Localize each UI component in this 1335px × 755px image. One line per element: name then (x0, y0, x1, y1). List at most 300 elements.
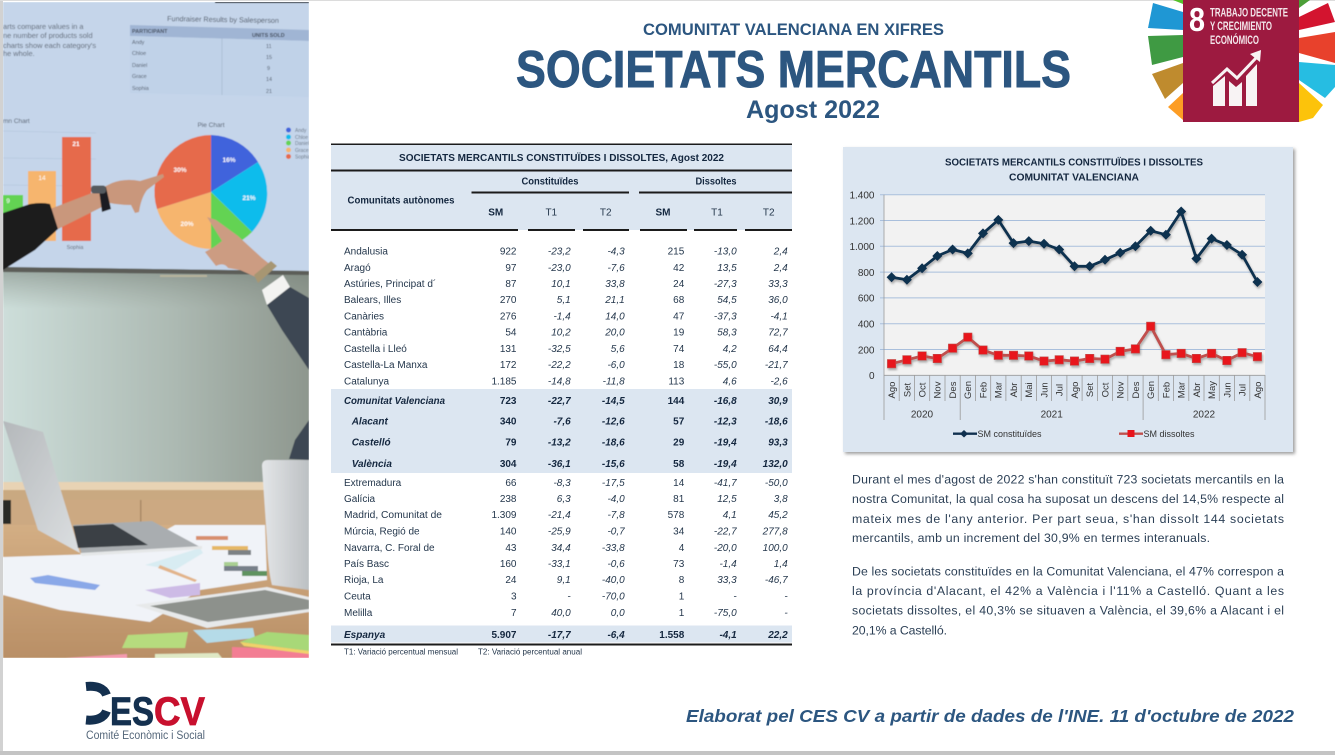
row: Catalunya (344, 376, 788, 388)
row: Castella-La Manxa: -6,0 (607, 360, 625, 371)
line: SM constituïdes (892, 212, 1257, 282)
row: Catalunya: -11,8 (603, 376, 625, 388)
row: Astúries: 33,3 (768, 279, 788, 290)
row: València: -15,6 (602, 459, 625, 470)
row: País Basc: País Basc (344, 559, 389, 570)
screen pie chart: Grace (295, 148, 309, 154)
table header bands (331, 144, 792, 231)
year labels: 2021 (1041, 410, 1063, 420)
row: Castella-La Manxa: -22,2 (548, 360, 571, 371)
row: València: València (352, 459, 392, 470)
icon: SDG 8 badge with coloured wheel: TRABAJO DECENTE (1210, 8, 1288, 20)
row: Astúries (344, 278, 788, 290)
row: Castelló: Castelló (352, 438, 391, 448)
column headers: Constituïdes (522, 176, 579, 188)
row: Catalunya: -2,6 (770, 376, 788, 388)
row: Andalusia: -4,3 (607, 246, 625, 258)
screen table: 9 (267, 66, 270, 72)
axis ticks (884, 195, 1265, 420)
month labels: Abr (1192, 383, 1203, 397)
kicker: COMUNITAT VALENCIANA EN XIFRES (643, 21, 944, 39)
month labels: Gen (963, 381, 974, 399)
row: Andalusia: Andalusia (344, 246, 388, 258)
row: Andalusia: 2,4 (773, 246, 788, 258)
row: Cantàbria: 72,7 (768, 328, 788, 338)
line: SM dissoltes (892, 326, 1257, 364)
row: Rioja: 24 (505, 575, 517, 586)
row: Castella-La Manxa (344, 360, 788, 371)
row: Múrcia: 140 (500, 526, 517, 538)
row: Castella i Lleó: 131 (500, 344, 517, 355)
row: Galícia: 3,8 (774, 494, 788, 505)
row: Balears: 21,1 (604, 295, 625, 306)
highlight band: Comunitat Valenciana (331, 389, 792, 473)
row: Alacant: -12,3 (714, 416, 737, 428)
row: Castelló: -18,6 (602, 438, 625, 448)
row: Comunitat Valenciana (344, 396, 788, 407)
screen table: Andy (132, 40, 145, 46)
y axis labels: 800 (858, 268, 875, 279)
row: Galícia (344, 494, 788, 505)
row: Balears: 54,5 (717, 295, 737, 306)
row: Ceuta: -70,0 (602, 592, 625, 602)
row: Balears: 68 (673, 295, 685, 306)
row: Castella i Lleó: 64,4 (768, 344, 788, 355)
laptop right (262, 460, 309, 590)
row: Canàries: -37,3 (714, 312, 737, 322)
table footnote: T2: Variació percentual anual (478, 648, 582, 656)
year labels (911, 410, 1216, 420)
month labels: Feb (1161, 382, 1172, 398)
month labels: Nov (1116, 381, 1127, 398)
row: Catalunya: 4,6 (723, 376, 737, 388)
screen pie chart (154, 122, 311, 249)
row: Rioja: Rioja, La (344, 575, 384, 586)
row: Ceuta: 1 (679, 592, 685, 602)
title block (516, 21, 1071, 124)
row: Balears (344, 295, 788, 306)
row: Castelló: -13,2 (548, 438, 571, 448)
screen column chart: 21 (72, 141, 80, 148)
icon: SDG 8 badge with coloured wheel: 8 (1189, 1, 1205, 38)
row: Aragó: Aragó (344, 263, 371, 274)
month labels: Jul (1055, 384, 1066, 396)
row: Galícia: 238 (500, 494, 517, 505)
row: Extremadura: -50,0 (765, 478, 788, 489)
column headers: Dissoltes (696, 176, 737, 188)
screen table: Fundraiser Results by Salesperson (167, 14, 279, 25)
row: Ceuta: Ceuta (344, 592, 371, 602)
month labels: Jun (1039, 382, 1050, 398)
row: Canàries: 14,0 (605, 312, 625, 322)
row: Balears: Balears, Illes (344, 295, 401, 306)
row: Aragó: 97 (505, 263, 517, 274)
row: País Basc: 73 (673, 559, 685, 570)
logo: CES CV (86, 686, 205, 742)
row: Catalunya: Catalunya (344, 376, 389, 388)
row: Galícia: 81 (673, 494, 685, 505)
column headers: T1 (545, 208, 558, 218)
row: Castella-La Manxa: -21,7 (765, 360, 788, 371)
laptop left (3, 421, 202, 556)
row: València: 58 (673, 459, 685, 470)
screen pie chart: Daniel (295, 141, 309, 147)
row: València: 132,0 (763, 459, 788, 470)
row: Navarra (344, 543, 788, 554)
row: Comunitat Valenciana: -16,8 (714, 396, 737, 407)
source credit: Elaborat pel CES CV a partir de dades de l'INE. 11 d'octubre de 2022 (686, 706, 1294, 726)
row: Rioja: 33,3 (717, 575, 737, 586)
screen pie chart: 20% (180, 221, 194, 228)
row: Castelló (352, 438, 788, 448)
month labels: Nov (933, 381, 944, 398)
row: València (352, 459, 788, 470)
row: Cantàbria: Cantàbria (344, 328, 388, 338)
row: Madrid: -21,4 (548, 510, 571, 521)
row: Canàries: 276 (500, 312, 517, 322)
row: Navarra: 4 (679, 543, 685, 554)
row: Espanya: 1.558 (659, 630, 685, 641)
screen pie chart: 16% (222, 157, 236, 164)
row: Ceuta: - (567, 592, 571, 602)
screen text block: ne number of products sold (3, 31, 93, 40)
row: Aragó: 2,4 (773, 263, 788, 274)
row: Balears: 5,1 (557, 295, 571, 306)
row: Castella i Lleó: -32,5 (548, 344, 571, 355)
row: Espanya: -6,4 (607, 630, 625, 641)
row: Ceuta: - (784, 592, 788, 602)
row: Castella-La Manxa: 172 (500, 360, 517, 371)
month labels: May (1207, 381, 1218, 399)
month labels: Mai (1024, 382, 1035, 398)
row: Cantàbria: 20,0 (604, 328, 625, 338)
row: Catalunya: 1.185 (491, 376, 517, 388)
row: Galícia: 6,3 (557, 494, 571, 505)
row: Astúries: Astúries, Principat d´ (344, 278, 436, 290)
plot area (884, 195, 1265, 375)
screen table: 21 (266, 89, 272, 95)
row: Espanya: 22,2 (767, 630, 788, 641)
row: València: -36,1 (548, 459, 571, 470)
screen text block: he whole. (3, 49, 35, 58)
row: Múrcia: Múrcia, Regió de (344, 526, 420, 538)
month labels: Oct (1100, 382, 1111, 397)
row: Ceuta: - (733, 592, 737, 602)
row: Comunitat Valenciana: -14,5 (602, 396, 625, 407)
table rows (344, 246, 788, 641)
logo: CES CV: Comité Econòmic i Social (86, 730, 205, 742)
tablet (135, 587, 309, 628)
chart legend: SM dissoltes (1144, 429, 1195, 439)
month labels (887, 381, 1264, 399)
row: València: 304 (500, 459, 517, 470)
row: País Basc: -0,6 (607, 559, 625, 570)
row: Alacant: -12,6 (602, 416, 625, 428)
y axis labels: 1.200 (849, 216, 875, 227)
row: Cantàbria: 54 (505, 328, 517, 338)
row: Alacant: 57 (673, 416, 685, 428)
row: Castella i Lleó: Castella i Lleó (344, 344, 407, 355)
row: Castella-La Manxa: -55,0 (714, 360, 737, 371)
column headers: T1 (711, 208, 723, 218)
row: Múrcia: 277,8 (762, 526, 788, 538)
row: Comunitat Valenciana: Comunitat Valenciana (344, 396, 445, 407)
row: Balears: 270 (500, 295, 517, 306)
row: Alacant: 340 (500, 416, 517, 428)
row: Castella i Lleó: 74 (673, 344, 685, 355)
left arm pointing (3, 174, 164, 270)
icon: SDG 8 badge with coloured wheel (1148, 0, 1335, 122)
row: Astúries: 87 (505, 279, 517, 290)
sticky notes (65, 628, 309, 658)
month labels: Feb (978, 382, 989, 398)
row: Melilla: 40,0 (551, 608, 571, 619)
screen column chart: 9 (6, 198, 10, 205)
table title: SOCIETATS MERCANTILS CONSTITUÏDES I DISSOLTES, Agost 2022 (399, 151, 724, 164)
data table (331, 144, 792, 656)
row: Cantàbria (344, 328, 788, 338)
table footnote: T1: Variació percentual mensual (344, 648, 458, 656)
row: Melilla: - (784, 608, 788, 619)
month labels: Set (1085, 383, 1096, 397)
text block: paragraph 2: la província d'Alacant, el 42% a València i l'11% a Castelló. Quant a les (852, 584, 1284, 598)
row: Alacant (351, 416, 788, 428)
row: Astúries: 24 (673, 279, 685, 290)
row: València: -19,4 (714, 459, 737, 470)
row: Andalusia: 922 (500, 246, 517, 258)
row: Espanya: 5.907 (491, 630, 517, 641)
row: Aragó: -23,0 (548, 263, 571, 274)
screen column chart: mn Chart (3, 118, 30, 125)
row: Canàries: -4,1 (770, 312, 788, 322)
y axis labels (849, 190, 875, 382)
column headers: SM (656, 208, 670, 218)
row: Múrcia: -25,9 (548, 526, 571, 538)
row: Aragó: 13,5 (717, 263, 737, 274)
month labels: Mar (1177, 382, 1188, 398)
photo: people pointing at charts on a screen above a desk (3, 0, 311, 658)
row: Castella i Lleó: 4,2 (723, 344, 737, 355)
chart title: COMUNITAT VALENCIANA (1009, 172, 1139, 184)
screen text block: charts show each category's (3, 41, 96, 50)
row: Madrid: 4,1 (723, 510, 737, 521)
logo: CES CV: CV (154, 690, 205, 734)
row: Cantàbria: 58,3 (717, 328, 737, 338)
row: Navarra: -20,0 (714, 543, 737, 554)
row: Astúries: 10,1 (551, 279, 571, 290)
column headers: T2 (600, 208, 612, 218)
row: Melilla (344, 608, 788, 619)
y axis labels: 0 (869, 371, 875, 382)
month labels: Des (948, 381, 959, 398)
screen table: Chloe (132, 51, 146, 57)
row: País Basc: -1,4 (719, 559, 737, 570)
row: Extremadura: -41,7 (714, 478, 737, 489)
row: Andalusia: -13,0 (714, 246, 737, 258)
row: Rioja: -46,7 (765, 575, 788, 586)
screen column chart (3, 118, 96, 251)
screen pie chart: 30% (173, 167, 187, 174)
icon: SDG 8 badge with coloured wheel: ECONÓMICO (1210, 34, 1259, 47)
screen table: UNITS SOLD (252, 33, 285, 39)
row: Andalusia (344, 246, 788, 258)
row: Cantàbria: 19 (673, 328, 685, 338)
screen pie chart: Pie Chart (197, 122, 225, 129)
row: Cantàbria: 10,2 (551, 328, 571, 338)
highlight band: Espanya (331, 626, 792, 642)
text block: paragraph 1 (852, 472, 1284, 545)
row: Astúries: -27,3 (714, 279, 737, 290)
row: Madrid: Madrid, Comunitat de (344, 510, 442, 521)
row: Castella-La Manxa: Castella-La Manxa (344, 360, 428, 371)
chart title: SOCIETATS MERCANTILS CONSTITUÏDES I DISSOLTES (945, 156, 1203, 168)
right arm pointing (205, 217, 309, 460)
row: Castelló: -19,4 (714, 438, 737, 448)
row: Rioja: 8 (679, 575, 685, 586)
row: Navarra: Navarra, C. Foral de (344, 543, 435, 554)
wall behind the screen (3, 265, 309, 485)
logo: CES CV: ES (110, 690, 154, 734)
papers on the desk (3, 525, 267, 622)
row: Andalusia: -23,2 (548, 246, 571, 258)
month labels: Jul (1238, 384, 1248, 396)
row: País Basc: 160 (500, 559, 517, 570)
row: Múrcia (344, 526, 788, 538)
row: Alacant: -7,6 (553, 416, 571, 428)
row: Comunitat Valenciana: 30,9 (768, 396, 788, 407)
row: Madrid (344, 510, 788, 521)
row: Galícia: Galícia (344, 494, 376, 505)
row: Madrid: -7,8 (607, 510, 625, 521)
month labels: Abr (1009, 383, 1020, 397)
row: Castella i Lleó: 5,6 (611, 344, 625, 355)
screen table (130, 14, 309, 97)
date subtitle: Agost 2022 (746, 96, 880, 124)
y axis labels: 400 (858, 320, 875, 330)
row: Castella i Lleó (344, 344, 788, 355)
screen pie chart: Chloe (295, 135, 308, 141)
row: País Basc: 1,4 (774, 559, 788, 570)
row: Aragó: -7,6 (607, 263, 625, 274)
row: Castelló: 29 (673, 438, 685, 448)
screen text block (3, 22, 96, 58)
column headers: T2 (763, 208, 775, 218)
chart legend (953, 429, 1195, 439)
row: Melilla: 0,0 (611, 608, 625, 619)
row: País Basc: -33,1 (548, 559, 571, 570)
y axis labels: 1.400 (849, 190, 875, 202)
row: Canàries: Canàries (344, 312, 384, 322)
row: Ceuta: 3 (511, 592, 517, 602)
row: Galícia: 12,5 (717, 494, 737, 505)
row: Alacant: Alacant (351, 416, 388, 428)
text block: paragraph 2: De les societats constituïdes en la Comunitat Valenciana, el 47% correspon a (852, 564, 1284, 578)
row: Espanya: Espanya (344, 630, 386, 641)
row: Rioja: -40,0 (602, 575, 625, 586)
row: Canàries (344, 312, 788, 322)
row: Múrcia: 34 (673, 526, 685, 538)
chart title (945, 156, 1203, 184)
screen (3, 0, 309, 277)
row: Aragó: 42 (673, 263, 685, 274)
column headers (348, 176, 775, 218)
row: Catalunya: 113 (668, 376, 685, 388)
screen pie chart: 21% (242, 195, 256, 202)
row: Extremadura: 66 (505, 478, 517, 489)
chart panel (843, 147, 1293, 452)
row: Alacant: -18,6 (765, 416, 788, 428)
y axis labels: 1.000 (849, 242, 875, 253)
row: Madrid: 45,2 (768, 510, 788, 521)
screen table: 15 (266, 55, 272, 61)
text block: paragraph 2: 20,1% a Castelló. (852, 624, 947, 638)
row: Astúries: 33,8 (605, 279, 625, 290)
row: Comunitat Valenciana: -22,7 (548, 396, 571, 407)
row: Espanya: -17,7 (548, 630, 571, 641)
text block: paragraph 1: mercantils, amb un increment del 30,9% en termes interanuals. (852, 531, 1210, 545)
row: Madrid: 578 (668, 510, 685, 521)
row: Galícia: -4,0 (607, 494, 625, 505)
row: Balears: 36,0 (768, 295, 788, 306)
screen table: 11 (266, 44, 272, 50)
chart legend: SM constituïdes (978, 429, 1042, 439)
text block: paragraph 2 (852, 564, 1284, 638)
month labels: Set (902, 383, 913, 397)
row: Melilla: 7 (511, 608, 517, 619)
screen table: Grace (132, 74, 147, 80)
month labels: Mar (994, 382, 1005, 398)
year labels: 2020 (911, 410, 934, 420)
month labels: Jun (1222, 382, 1233, 398)
screen table: Daniel (132, 63, 147, 69)
table footnote (344, 648, 582, 656)
row: Castelló: 79 (505, 438, 517, 448)
year labels: 2022 (1193, 410, 1216, 420)
row: Navarra: 43 (505, 543, 517, 554)
row: Múrcia: -0,7 (607, 526, 625, 538)
month labels: Gen (1146, 381, 1157, 399)
row: Madrid: 1.309 (491, 510, 517, 521)
screen column chart: Sophia (67, 245, 83, 251)
row: Rioja: 9,1 (557, 575, 571, 586)
row: Andalusia: 215 (668, 246, 685, 258)
icon: SDG 8 badge with coloured wheel: Y CRECIMIENTO (1210, 21, 1272, 33)
screen table: Sophia (132, 86, 149, 92)
row: Aragó (344, 263, 788, 274)
screen table: 14 (266, 77, 272, 83)
row: Extremadura: 14 (673, 478, 685, 489)
row: Espanya: -4,1 (719, 630, 737, 641)
row: País Basc (344, 559, 788, 570)
row: Catalunya: -14,8 (548, 376, 571, 388)
month labels: Des (1131, 381, 1142, 398)
month labels: Ago (1253, 382, 1264, 398)
screen text block: arts compare values in a (3, 22, 84, 31)
screen column chart: 14 (38, 175, 46, 182)
row: Comunitat Valenciana: 723 (500, 396, 517, 407)
month labels: Oct (918, 382, 928, 397)
row: Canàries: -1,4 (553, 312, 571, 322)
row: Navarra: -33,8 (602, 543, 625, 554)
screen pie chart: Sophia (295, 154, 311, 160)
wood rail and cabinet (3, 482, 309, 658)
y axis labels: 600 (858, 294, 875, 305)
row: Múrcia: -22,7 (714, 526, 737, 538)
row: Extremadura (344, 478, 788, 489)
row: Extremadura: Extremadura (344, 478, 402, 489)
screen table: PARTICIPANT (132, 29, 168, 35)
row: Canàries: 47 (673, 312, 685, 322)
